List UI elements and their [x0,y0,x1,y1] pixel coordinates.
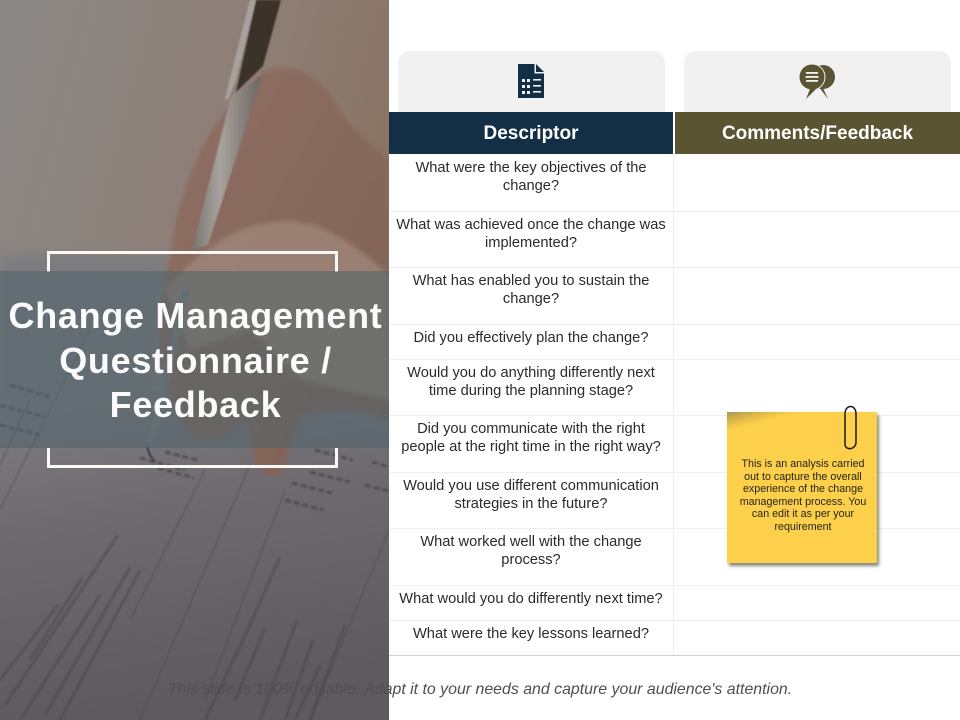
sticky note [726,406,882,568]
question 7: Would you use different communication [403,478,659,494]
question 6 [401,421,661,455]
note text: requirement [774,521,832,533]
question 6: Did you communicate with the right [417,421,645,437]
question 1: change? [503,178,559,194]
panel: background photo of hand writing on a form [0,0,389,720]
question 10: What were the key lessons learned? [413,626,649,642]
question 2: What was achieved once the change was [396,217,666,233]
question 2 [396,217,666,251]
question 8: process? [501,552,561,568]
question 5 [407,365,655,399]
note text: can edit it as per your [752,508,854,520]
note text [740,458,866,533]
question 8 [420,534,642,568]
question 4: Did you effectively plan the change? [414,330,648,346]
title: Change Management [9,295,382,336]
note text: This is an analysis carried [742,458,864,470]
title: Feedback [110,384,281,425]
note text: management process. You [740,496,866,508]
form tick boxes [0,385,389,510]
question 3: change? [503,291,559,307]
question 5: Would you do anything differently next [407,365,655,381]
question 9: What would you do differently next time? [399,591,663,607]
question 1: What were the key objectives of the [415,160,647,176]
question 7: strategies in the future? [454,496,608,512]
question 6: people at the right time in the right way? [401,439,661,455]
icon: speech bubbles [800,64,835,99]
band: translucent slate title background [0,271,389,448]
title: Questionnaire / [59,340,332,380]
question 1 [415,160,647,194]
icon: document with list [518,64,544,98]
question 8: What worked well with the change [420,534,642,550]
pen [147,0,281,462]
header: Comments/Feedback [675,112,960,154]
question 3: What has enabled you to sustain the [413,273,649,289]
note paper [727,412,877,563]
title [9,295,382,425]
question 7 [403,478,659,512]
form lines [0,330,389,720]
note text: experience of the change [743,483,863,495]
icon: paper clip [844,406,857,450]
question 2: implemented? [485,235,577,251]
tab: descriptor icon tab [398,51,665,112]
hand [159,68,389,476]
question 5: time during the planning stage? [429,383,633,399]
frame: white title bracket [47,251,338,468]
blurred printed text on form [0,535,345,720]
note text: out to capture the overall [744,471,862,483]
header: Descriptor: Descriptor [483,123,579,144]
header: Comments/Feedback: Comments/Feedback [722,123,913,144]
question 3 [412,273,649,307]
footer note: This slide is 100% editable. Adapt it to your needs and capture your audience's attention. [168,681,792,698]
header: Descriptor [389,112,673,154]
tab: comments icon tab [684,51,951,112]
